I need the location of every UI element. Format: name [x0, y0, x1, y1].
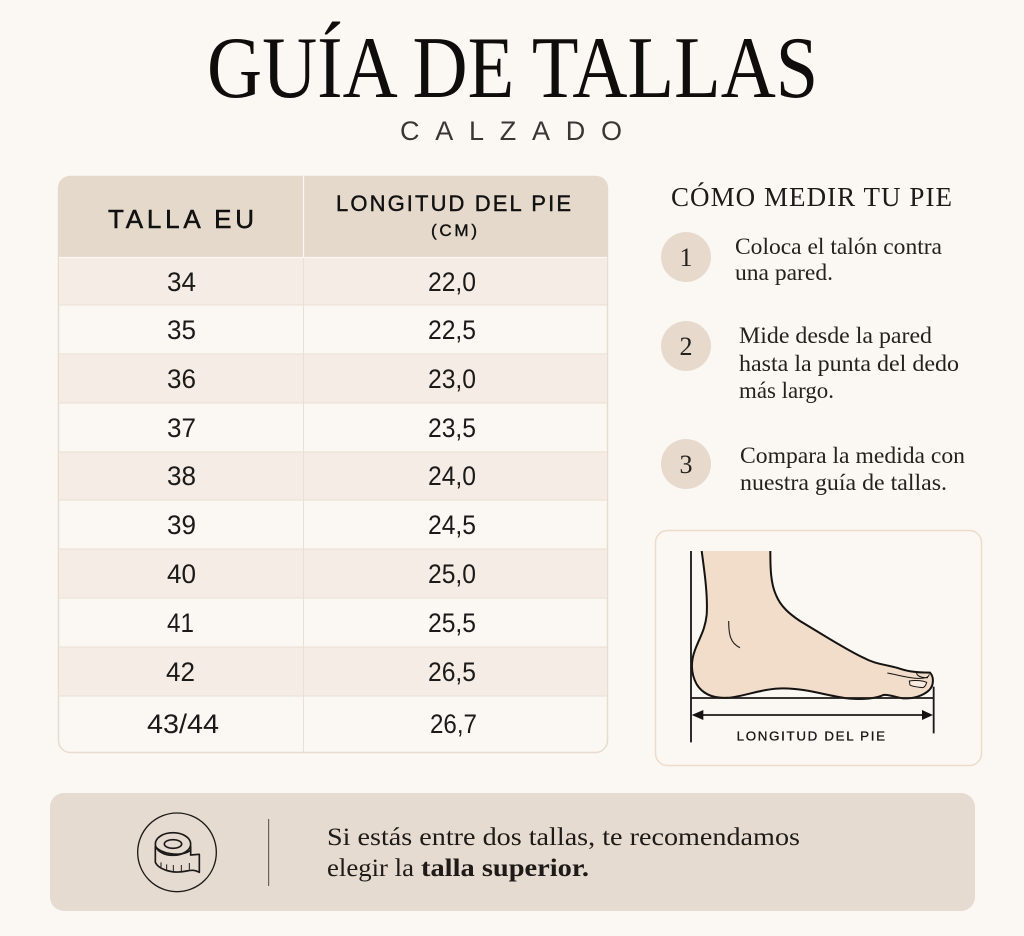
measuring arrows — [692, 710, 933, 720]
row 37: 37 — [167, 413, 196, 443]
advice text: elegir la — [327, 855, 414, 882]
row 41: 25,5 — [428, 608, 476, 638]
row 40: 40 — [167, 559, 196, 589]
row 36: 23,0 — [428, 364, 476, 394]
advice text: Si estás entre dos tallas, te recomendamos — [327, 824, 800, 851]
row 36: 36 — [167, 364, 196, 394]
step 1: 1 — [680, 243, 692, 272]
step 2: 2 — [680, 332, 692, 361]
step 3: nuestra guía de tallas. — [740, 470, 947, 495]
row 34: 22,0 — [428, 267, 476, 297]
row 38 — [167, 461, 476, 491]
subtitle: CALZADO — [400, 116, 622, 146]
row 39 — [167, 510, 476, 540]
icon: measuring tape — [137, 812, 217, 892]
heading: how to measure: CÓMO MEDIR TU PIE — [671, 182, 952, 212]
foot illustration — [690, 550, 935, 744]
row 43/44 — [147, 709, 477, 739]
title: GUÍA DE TALLAS — [207, 19, 818, 116]
row 37 — [167, 413, 476, 443]
diagram label: LONGITUD DEL PIE — [737, 729, 885, 744]
row 42 — [166, 657, 476, 687]
row 35: 35 — [167, 315, 196, 345]
header: talla eu: TALLA EU — [108, 204, 254, 234]
header: longitud del pie: LONGITUD DEL PIE — [336, 191, 571, 216]
header: longitud del pie — [336, 191, 571, 240]
step 1: Coloca el talón contra — [735, 234, 942, 259]
header: longitud del pie: (CM) — [431, 221, 477, 240]
row 38: 38 — [167, 461, 196, 491]
step 1: una pared. — [735, 260, 833, 285]
row 41 — [167, 608, 476, 638]
row 41: 41 — [167, 608, 194, 638]
measuring lines — [691, 551, 934, 742]
panel: advice banner — [50, 793, 975, 911]
row stripes — [59, 258, 607, 696]
row 43/44: 43/44 — [147, 709, 219, 739]
row 34: 34 — [167, 267, 196, 297]
advice text: talla superior. — [421, 855, 589, 882]
table header background — [58, 176, 608, 257]
step 2: hasta la punta del dedo — [739, 351, 959, 376]
row 40 — [167, 559, 476, 589]
step 3: Compara la medida con — [740, 443, 966, 468]
row 38: 24,0 — [428, 461, 476, 491]
step 2: Mide desde la pared — [739, 323, 933, 348]
panel: size table — [58, 176, 608, 752]
row 35: 22,5 — [428, 315, 476, 345]
row 43/44: 26,7 — [430, 709, 477, 739]
row 37: 23,5 — [428, 413, 476, 443]
step 1 — [661, 232, 942, 285]
row 39: 39 — [167, 510, 196, 540]
row 39: 24,5 — [428, 510, 476, 540]
row 36 — [167, 364, 476, 394]
advice text — [327, 824, 800, 882]
step 3: 3 — [680, 450, 692, 479]
row 35 — [167, 315, 476, 345]
row 42: 26,5 — [428, 657, 476, 687]
panel: foot diagram — [656, 530, 982, 766]
row 34 — [167, 267, 476, 297]
step 2: más largo. — [739, 378, 834, 403]
step 2 — [661, 321, 959, 403]
step 3 — [661, 439, 966, 495]
divider — [268, 819, 269, 886]
row 42: 42 — [166, 657, 195, 687]
row 40: 25,0 — [428, 559, 476, 589]
